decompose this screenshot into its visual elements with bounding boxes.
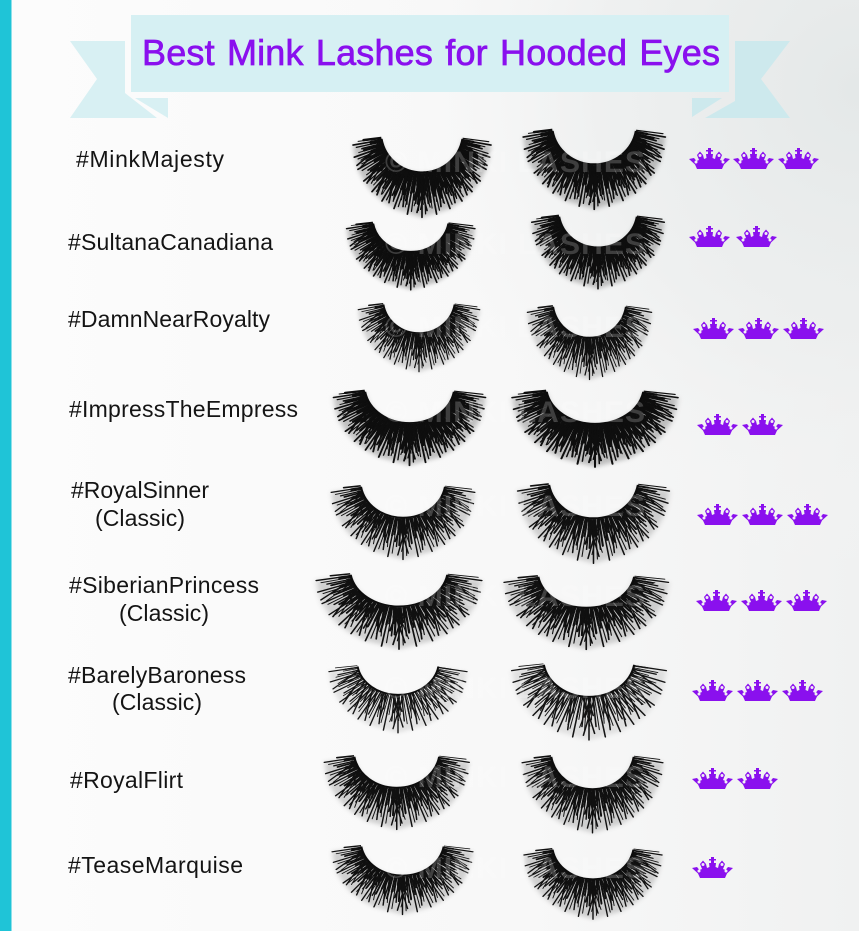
label: #ImpressTheEmpress bbox=[69, 396, 298, 422]
row 6: SiberianPrincess bbox=[69, 572, 827, 650]
watermark: © MINKI LASHES bbox=[385, 580, 645, 613]
row 3: DamnNearRoyalty bbox=[68, 302, 824, 380]
right lash bbox=[532, 214, 665, 289]
sublabel: (Classic) bbox=[119, 600, 209, 626]
left lash bbox=[329, 664, 467, 733]
crown rating bbox=[693, 318, 824, 339]
label: #SultanaCanadiana bbox=[68, 229, 273, 255]
label: #MinkMajesty bbox=[76, 146, 224, 172]
title: Best Mink Lashes for Hooded Eyes bbox=[142, 32, 720, 73]
crown rating bbox=[697, 414, 783, 435]
watermark: © MINKI LASHES bbox=[385, 396, 645, 429]
right lash bbox=[512, 662, 666, 740]
right lash bbox=[518, 482, 669, 563]
left lash bbox=[334, 389, 486, 465]
crown rating bbox=[697, 504, 828, 525]
banner panel bbox=[131, 15, 729, 92]
left accent strip bbox=[0, 0, 12, 931]
row 5: RoyalSinner bbox=[71, 477, 828, 563]
crown rating bbox=[689, 148, 819, 169]
right lash bbox=[512, 389, 679, 467]
row 7: BarelyBaroness bbox=[68, 662, 823, 740]
label: #BarelyBaroness bbox=[68, 662, 246, 688]
watermark: © MINKI LASHES bbox=[385, 311, 645, 344]
crown rating bbox=[696, 590, 827, 611]
row 4: ImpressTheEmpress bbox=[69, 389, 783, 467]
label: #DamnNearRoyalty bbox=[68, 306, 270, 332]
watermark: © MINKI LASHES bbox=[385, 852, 645, 885]
right lash bbox=[523, 128, 666, 209]
left lash bbox=[353, 136, 492, 217]
label: #RoyalSinner bbox=[71, 477, 209, 503]
watermark: © MINKI LASHES bbox=[385, 146, 645, 179]
row 9: TeaseMarquise bbox=[68, 844, 733, 919]
title banner bbox=[70, 15, 790, 118]
left ribbon fold bbox=[135, 98, 168, 118]
left lash bbox=[358, 302, 480, 372]
left lash bbox=[347, 221, 476, 290]
right lash bbox=[522, 754, 663, 833]
row 1: MinkMajesty bbox=[76, 128, 819, 217]
sublabel: (Classic) bbox=[112, 689, 202, 715]
crown rating bbox=[692, 857, 733, 878]
label: #TeaseMarquise bbox=[68, 852, 243, 878]
right lash bbox=[527, 304, 652, 380]
watermark: © MINKI LASHES bbox=[385, 228, 645, 261]
watermark: © MINKI LASHES bbox=[385, 490, 645, 523]
left lash bbox=[324, 754, 469, 830]
crown rating bbox=[692, 680, 823, 701]
left lash bbox=[316, 572, 482, 649]
watermark: © MINKI LASHES bbox=[385, 672, 645, 705]
left ribbon tail bbox=[70, 41, 157, 118]
crown rating bbox=[692, 768, 778, 789]
right ribbon tail bbox=[705, 41, 790, 118]
right lash bbox=[504, 574, 668, 650]
row 2: SultanaCanadiana bbox=[68, 214, 777, 290]
right ribbon fold bbox=[692, 98, 722, 117]
label: #RoyalFlirt bbox=[70, 767, 184, 793]
left lash bbox=[332, 844, 473, 915]
left lash bbox=[331, 484, 475, 560]
sublabel: (Classic) bbox=[95, 505, 185, 531]
label: #SiberianPrincess bbox=[69, 572, 259, 598]
watermark: © MINKI LASHES bbox=[385, 761, 645, 794]
row 8: RoyalFlirt bbox=[70, 754, 778, 833]
right lash bbox=[524, 847, 662, 919]
crown rating bbox=[689, 226, 777, 247]
